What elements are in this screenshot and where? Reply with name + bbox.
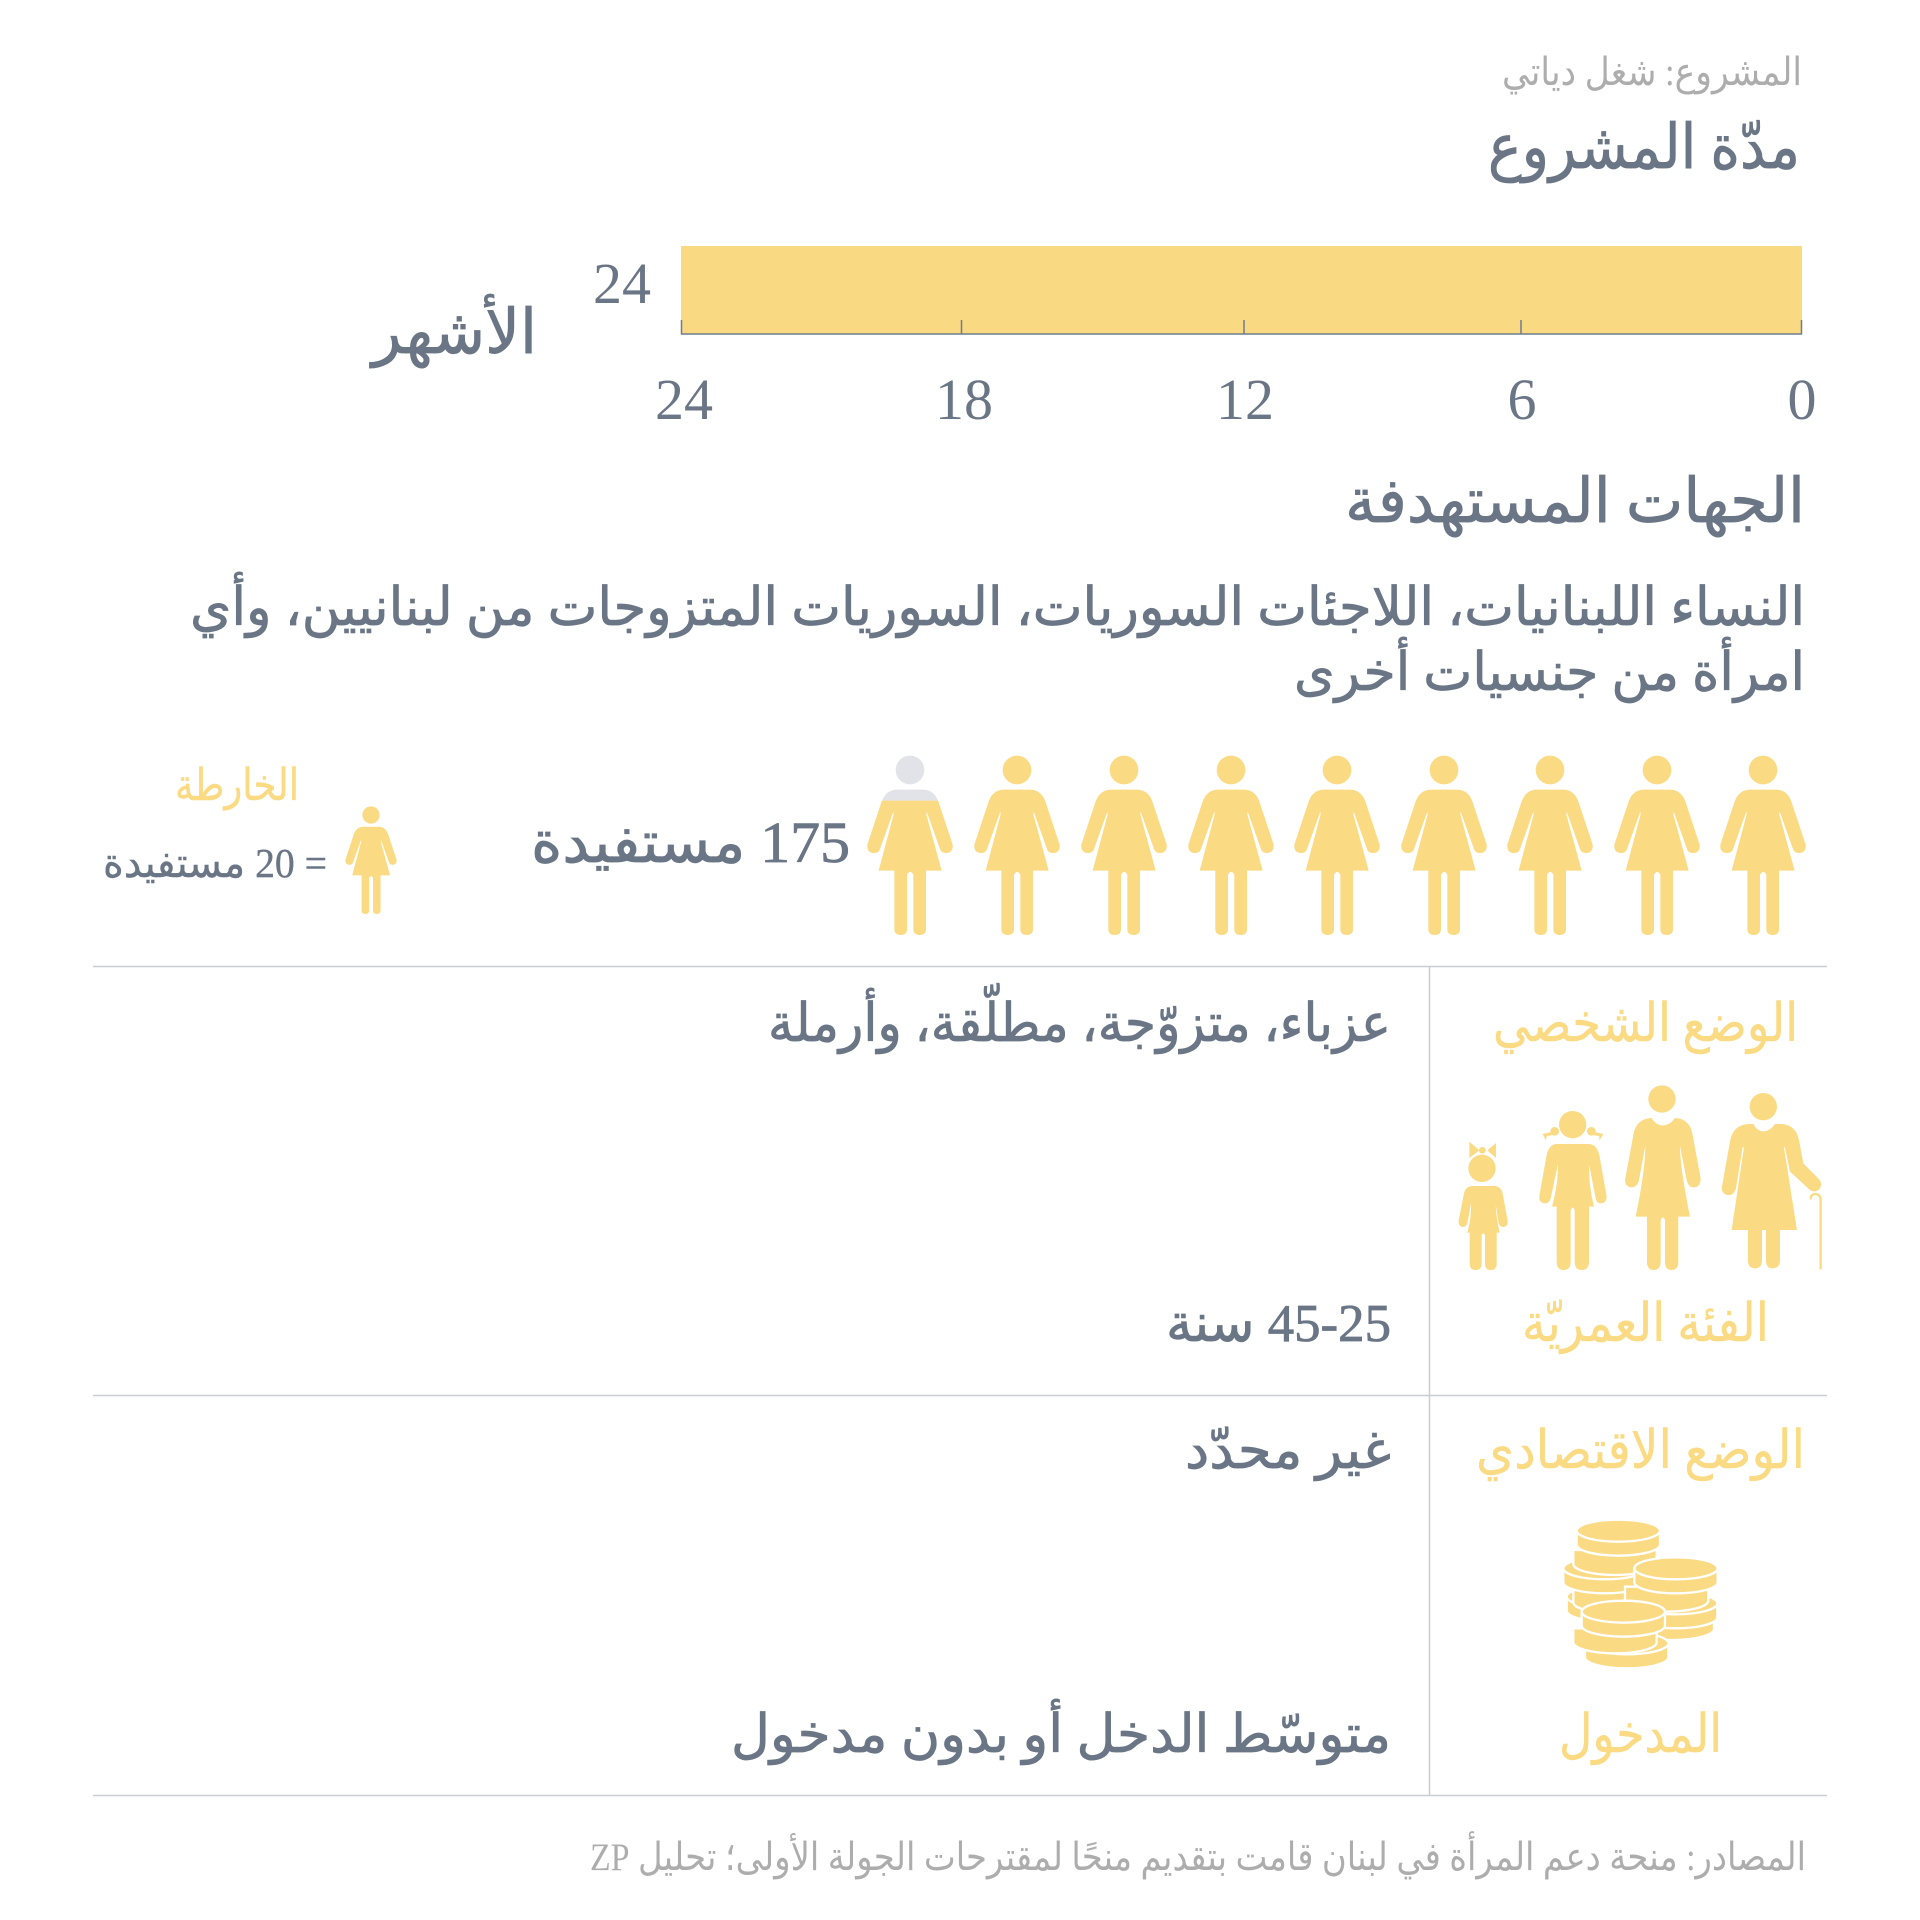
row label: age group: الفئة العمريّة <box>1522 1295 1769 1354</box>
legend title: الخارطة <box>175 761 299 811</box>
pictogram: beneficiaries <box>867 756 1806 935</box>
bar chart: duration: 24 <box>655 367 713 432</box>
row label: income: المدخول <box>1559 1706 1722 1765</box>
legend text: = 20 مستفيدة <box>103 840 327 886</box>
row label: personal status: الوضع الشخصي <box>1493 995 1798 1054</box>
description text: النساء اللبنانيات، اللاجئات السوريات، السوريات المتزوجات من لبنانيين، وأي <box>190 572 1805 638</box>
bar chart: duration: 6 <box>1508 367 1536 432</box>
bar chart: duration: 12 <box>1216 367 1274 432</box>
heading: project duration: مدّة المشروع <box>1488 114 1800 183</box>
row value: personal status: عزباء، متزوّجة، مطلّقة، وأرملة <box>768 982 1391 1054</box>
axis unit label: months: الأشهر <box>369 293 537 369</box>
description text: امرأة من جنسيات أخرى <box>1294 637 1805 703</box>
icon: age group figures <box>1459 1085 1821 1270</box>
description text <box>190 572 1805 703</box>
table rules <box>93 966 1827 1796</box>
bar chart: duration <box>593 246 1816 432</box>
bar chart: duration: 24 <box>593 251 651 316</box>
heading: target groups: الجهات المستهدفة <box>1345 468 1805 538</box>
row value: age group: 45-25 سنة <box>1166 1295 1391 1353</box>
legend icon: woman <box>345 806 397 914</box>
icon: coins <box>1563 1520 1718 1668</box>
beneficiaries count: 175 مستفيدة <box>531 810 850 875</box>
project label: المشروع: شغل دياتي <box>1502 51 1802 95</box>
bar chart: duration: 18 <box>935 367 993 432</box>
row value: income: متوسّط الدخل أو بدون مدخول <box>731 1699 1391 1765</box>
row label: economic status: الوضع الاقتصادي <box>1476 1422 1805 1481</box>
bar chart: duration: 0 <box>1788 367 1816 432</box>
row value: economic status: غير محدّد <box>1185 1422 1391 1481</box>
